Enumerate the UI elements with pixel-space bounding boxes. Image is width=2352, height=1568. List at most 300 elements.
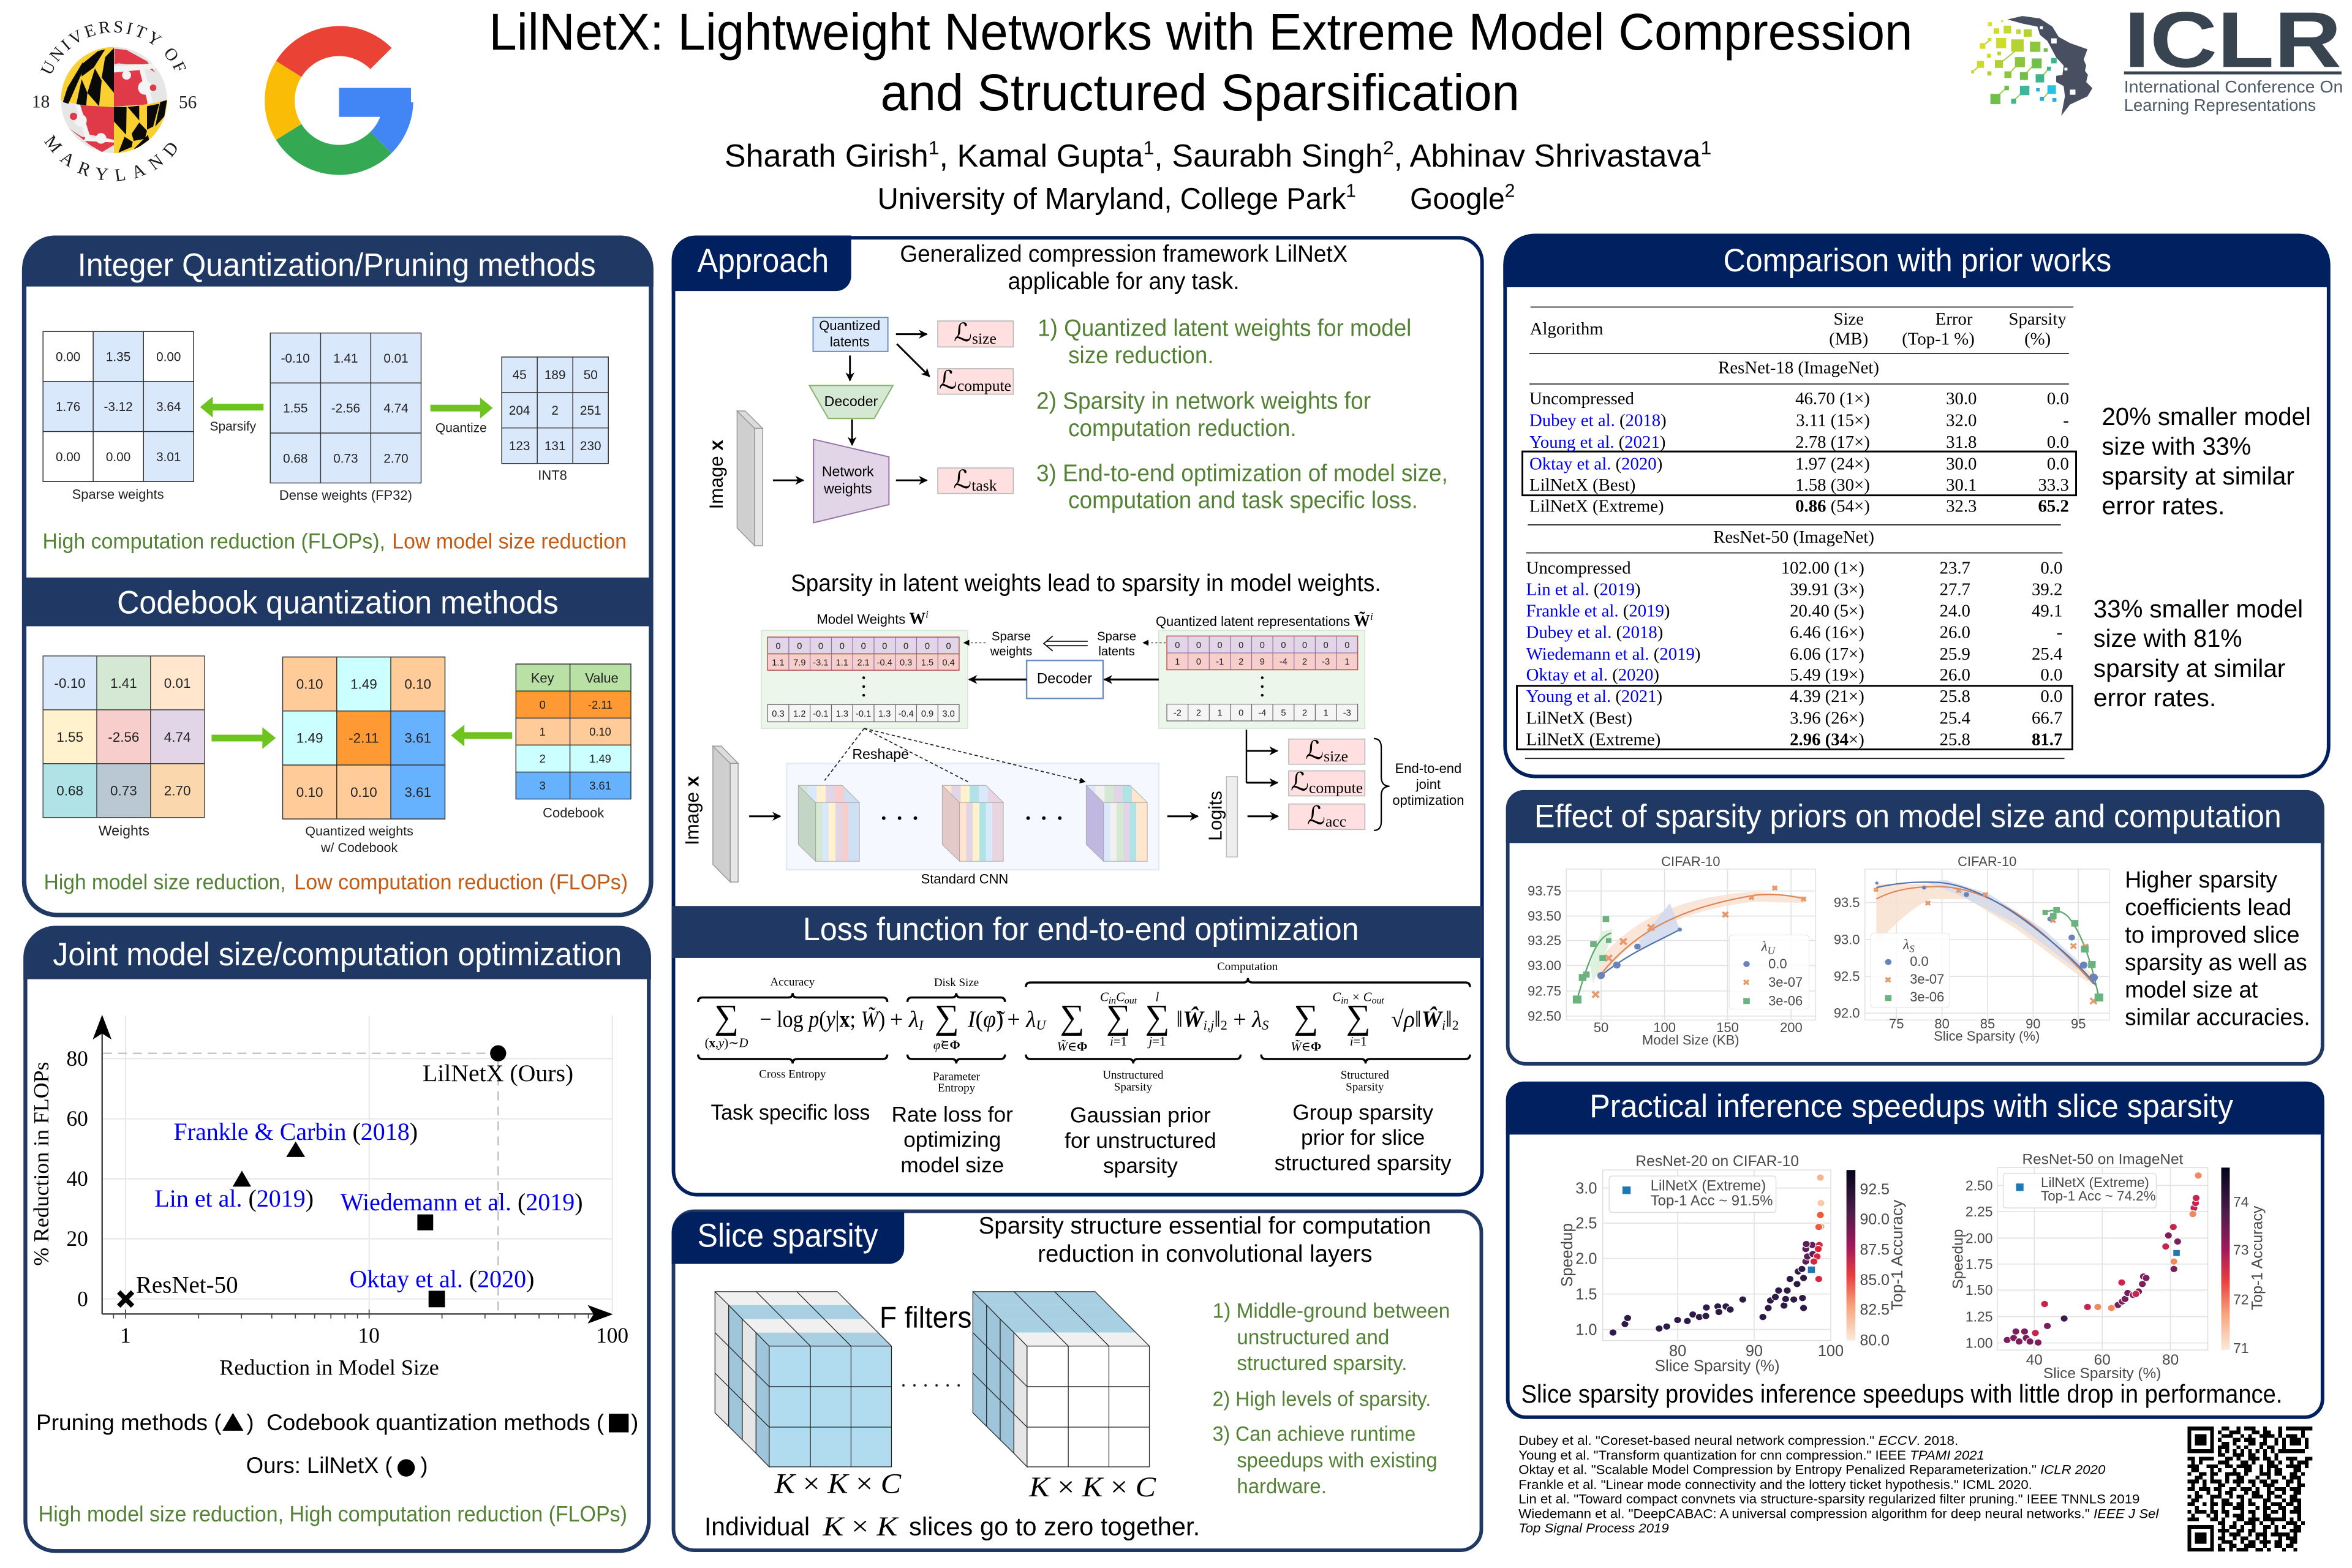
authors: , Abhinav Shrivastava bbox=[1394, 138, 1701, 174]
table: comparison results: 46.70 (1×) bbox=[1795, 389, 1870, 409]
table: codebook: 1 bbox=[540, 725, 546, 738]
box: standard CNN bbox=[786, 764, 1159, 886]
matrix: quantized latents: 1 bbox=[1218, 709, 1223, 718]
table: codebook: 2 bbox=[540, 752, 546, 765]
text: sparsity priors takeaway bbox=[2125, 867, 2310, 1031]
table: sparse weights: Sparse weights bbox=[72, 486, 164, 502]
matrix: model weights: 7.9 bbox=[793, 658, 805, 668]
table: comparison results: 30.1 bbox=[1946, 475, 1977, 495]
text: ResNet-18 takeaway: sparsity at similar bbox=[2101, 462, 2294, 490]
colorbar: ResNet-50 accuracy: 71 bbox=[2233, 1340, 2248, 1356]
arrow: quantize bbox=[431, 398, 493, 435]
table: comparison results: Oktay et al. (2020) bbox=[1526, 665, 1659, 685]
labels: sparse weights and latents: latents bbox=[1098, 645, 1135, 658]
loss boxes: size compute acc: ℒ bbox=[1307, 802, 1325, 830]
matrix: model weights: 1.3 bbox=[836, 709, 848, 719]
equation terms: + bbox=[1227, 1006, 1252, 1032]
matrix: quantized latents: -4 bbox=[1280, 657, 1287, 667]
matrix: model weights: 1.5 bbox=[921, 658, 933, 668]
matrix: quantized latents: 1 bbox=[1344, 657, 1349, 667]
matrix: model weights: 1.3 bbox=[878, 709, 891, 719]
text: ResNet-50 takeaway: 33% smaller model bbox=[2094, 595, 2303, 623]
equation terms: in bbox=[1341, 995, 1349, 1006]
text: slices caption: Individual bbox=[704, 1512, 810, 1540]
text: framework description: Generalized compression framework LilNetX bbox=[900, 241, 1348, 267]
text: speedups takeaway: Slice sparsity provides inference speedups with little drop in performance. bbox=[1521, 1379, 2282, 1408]
chart: model size versus FLOPs: Wiedemann et al. (2019) bbox=[341, 1188, 583, 1216]
arrows: reshape: Reshape bbox=[852, 746, 909, 762]
panel: comparison with prior works bbox=[1503, 234, 2330, 777]
chart: ResNet-50 speedup: ResNet-50 on ImageNet bbox=[2022, 1151, 2184, 1167]
table: quantized weights: 0.10 bbox=[296, 785, 323, 800]
references: Frankle et al. "Linear mode connectivity and the lottery ticket hypothesis." ICML 2020. bbox=[1518, 1477, 2032, 1492]
chart: ResNet-50 speedup: 80 bbox=[2162, 1352, 2179, 1368]
heading: joint optimization bbox=[23, 927, 651, 979]
chart: ResNet-50 speedup: 1.25 bbox=[1966, 1309, 1993, 1325]
table: INT8: 131 bbox=[545, 439, 565, 453]
arrow: weights to quantized bbox=[211, 727, 276, 749]
equation terms: I bbox=[918, 1017, 924, 1033]
matrix: model weights: 0.3 bbox=[900, 658, 912, 668]
matrix: model weights: 0 bbox=[925, 641, 930, 651]
chart: model size versus FLOPs: Lin et al. (2019) bbox=[154, 1185, 314, 1212]
chart: accuracy vs model size: 3e-07 bbox=[1768, 974, 1803, 990]
brace labels: Sparsity bbox=[1346, 1080, 1384, 1093]
chart: accuracy vs slice sparsity: Slice Sparsity (%) bbox=[1934, 1028, 2040, 1044]
table: comparison results: 102.00 (1×) bbox=[1781, 559, 1864, 578]
chart: model size versus FLOPs: 80 bbox=[66, 1046, 88, 1071]
table: sparse weights: 3.01 bbox=[156, 450, 181, 464]
table: dense weights: 0.68 bbox=[283, 451, 307, 466]
text: loss term descriptions: Task specific loss bbox=[710, 1100, 870, 1125]
legend: ResNet-50: LilNetX (Extreme) bbox=[2041, 1175, 2149, 1190]
chart: accuracy vs slice sparsity: 90 bbox=[2026, 1016, 2041, 1031]
table: INT8: 204 bbox=[509, 404, 530, 418]
colorbar: ResNet-20 accuracy: 92.5 bbox=[1860, 1181, 1890, 1198]
table: dense weights: 2.70 bbox=[383, 451, 409, 466]
equation terms: φ̃∈Φ bbox=[933, 1039, 960, 1052]
chart: accuracy vs slice sparsity: 93.0 bbox=[1834, 932, 1860, 947]
table: codebook: Key bbox=[531, 670, 554, 685]
chart: accuracy vs slice sparsity: 75 bbox=[1889, 1016, 1904, 1031]
matrix: model weights: 0 bbox=[861, 641, 866, 651]
chart: accuracy vs slice sparsity: CIFAR-10 bbox=[1958, 854, 2016, 869]
matrix: quantized latents: 0 bbox=[1196, 641, 1201, 650]
chart: ResNet-50 speedup bbox=[1950, 1151, 2266, 1382]
matrix: quantized latents: 2 bbox=[1238, 657, 1243, 667]
table: comparison results: Dubey et al. (2018) bbox=[1529, 410, 1667, 431]
chart: model size versus FLOPs: Frankle & Carbin (2018) bbox=[174, 1118, 418, 1145]
brace labels: Structured bbox=[1341, 1069, 1389, 1082]
references: Oktay et al. "Scalable Model Compression by Entropy Penalized Reparameterization." ICLR 2020 bbox=[1518, 1463, 2105, 1477]
legend: method markers bbox=[36, 1409, 638, 1478]
equation terms: out bbox=[1125, 995, 1137, 1006]
chart: ResNet-50 speedup: 2.00 bbox=[1966, 1230, 1993, 1246]
chart: accuracy vs model size: 93.75 bbox=[1528, 883, 1561, 899]
image slab 2 bbox=[713, 746, 738, 882]
chart: accuracy vs model size bbox=[1528, 854, 1815, 1047]
chart: accuracy vs model size: 200 bbox=[1780, 1020, 1803, 1035]
text: loss term descriptions: Rate loss for bbox=[892, 1102, 1013, 1126]
heading: joint optimization: Joint model size/computation optimization bbox=[53, 937, 622, 973]
chart: accuracy vs model size: 0.0 bbox=[1768, 956, 1787, 971]
brace labels: Computation bbox=[1217, 960, 1278, 973]
box: network weights bbox=[813, 439, 889, 522]
chart: accuracy vs slice sparsity: 95 bbox=[2071, 1016, 2086, 1031]
heading: integer quantization bbox=[22, 235, 654, 287]
text: slices caption: K × K bbox=[822, 1511, 899, 1541]
matrix: quantized latents bbox=[1159, 630, 1365, 728]
heading: inference speedups: Practical inference speedups with slice sparsity bbox=[1589, 1088, 2234, 1125]
labels: sparse weights and latents bbox=[990, 630, 1136, 658]
equation terms: C bbox=[1332, 991, 1341, 1005]
dots between cubes bbox=[902, 1384, 960, 1387]
colorbar: ResNet-20 accuracy bbox=[1847, 1170, 1890, 1349]
table: INT8: 230 bbox=[580, 439, 601, 453]
table: comparison results bbox=[1517, 307, 2076, 758]
table: comparison results: 0.86 (54×) bbox=[1795, 497, 1870, 516]
matrix: quantized latents: 1 bbox=[1175, 657, 1180, 667]
panel: effect of sparsity priors bbox=[1506, 790, 2324, 1064]
chart: accuracy vs slice sparsity: 0.0 bbox=[1910, 954, 1929, 969]
table: comparison results: 66.7 bbox=[2032, 708, 2062, 728]
chart: accuracy vs slice sparsity: 3e-07 bbox=[1910, 971, 1944, 987]
label: image x: Image x bbox=[682, 775, 703, 845]
table: dense weights: -2.56 bbox=[331, 401, 360, 415]
table: comparison results: 0.0 bbox=[2047, 432, 2069, 452]
legend: method markers: Ours: LilNetX ( bbox=[246, 1452, 393, 1478]
panel: practical inference speedups bbox=[1506, 1082, 2324, 1417]
equation terms: ∑ bbox=[1346, 998, 1371, 1036]
chart: ResNet-50 speedup: Slice Sparsity (%) bbox=[2043, 1365, 2161, 1382]
text: codebook tradeoff: High model size reduction, bbox=[44, 870, 286, 894]
heading: codebook quantization bbox=[25, 578, 650, 626]
table: weights: -0.10 bbox=[55, 676, 86, 691]
matrix: model weights: 1.1 bbox=[772, 658, 785, 668]
table: quantized weights: -2.11 bbox=[349, 731, 379, 746]
chart: ResNet-50 speedup: 1.00 bbox=[1966, 1335, 1993, 1351]
text: framework description: applicable for any task. bbox=[1008, 268, 1240, 295]
chart: accuracy vs model size: 150 bbox=[1716, 1020, 1739, 1035]
matrix: model weights: 0 bbox=[946, 641, 951, 651]
table: comparison results: LilNetX (Best) bbox=[1526, 708, 1632, 728]
equation terms: ‖ bbox=[1214, 1006, 1221, 1032]
panel: integer quantization and codebook methods bbox=[22, 235, 654, 915]
text: loss term descriptions: for unstructured bbox=[1065, 1128, 1216, 1153]
table: comparison results: Uncompressed bbox=[1529, 389, 1635, 409]
chart: model size versus FLOPs: Oktay et al. (2020) bbox=[349, 1265, 534, 1293]
loss boxes: size compute acc: size bbox=[1324, 747, 1348, 765]
chart: accuracy vs slice sparsity: S bbox=[1909, 943, 1915, 954]
table: comparison results: 30.0 bbox=[1946, 389, 1977, 409]
chart: ResNet-20 speedup: 80 bbox=[1669, 1343, 1686, 1360]
table: comparison results: 25.4 bbox=[2032, 644, 2062, 664]
box: network weights: weights bbox=[823, 481, 872, 497]
brace labels: Sparsity bbox=[1114, 1080, 1153, 1093]
heading: codebook quantization: Codebook quantization methods bbox=[117, 585, 559, 621]
logo: Google G bbox=[280, 41, 411, 160]
chart: model size versus FLOPs: 100 bbox=[596, 1323, 628, 1348]
heading: loss function bbox=[672, 906, 1482, 958]
matrix: model weights: 0 bbox=[775, 641, 781, 651]
authors: 1 bbox=[1144, 137, 1154, 159]
chart: model size versus FLOPs: 1 bbox=[120, 1323, 131, 1348]
equation terms: 2 bbox=[1452, 1017, 1459, 1033]
table: INT8: 189 bbox=[545, 368, 565, 382]
box: standard CNN: Standard CNN bbox=[921, 871, 1008, 886]
colorbar: ResNet-50 accuracy bbox=[2222, 1167, 2249, 1356]
brace labels bbox=[759, 960, 1389, 1095]
text: slice sparsity points: 3) Can achieve runtime bbox=[1213, 1423, 1415, 1446]
table: comparison results: 26.0 bbox=[1940, 622, 1970, 643]
loss boxes: size compute acc: acc bbox=[1325, 812, 1346, 830]
table: comparison results: Size bbox=[1833, 309, 1864, 329]
table: quantized weights: Quantized weights bbox=[305, 824, 413, 839]
matrix: model weights: -0.4 bbox=[899, 709, 914, 719]
logo: University of Maryland seal: 18 bbox=[32, 92, 50, 112]
equation terms: U bbox=[1036, 1017, 1047, 1033]
logo: University of Maryland seal: MARYLAND bbox=[44, 135, 176, 181]
matrix: model weights bbox=[761, 630, 968, 728]
labels: sparse weights and latents: Sparse bbox=[1097, 630, 1136, 644]
matrix: quantized latents: 0 bbox=[1344, 641, 1349, 650]
chart: accuracy vs model size: 3e-06 bbox=[1768, 993, 1803, 1009]
equation terms: ∑ bbox=[1060, 998, 1084, 1036]
labels: sparse weights and latents: weights bbox=[990, 645, 1032, 658]
text: integer quantization tradeoff bbox=[42, 530, 627, 554]
table: codebook: -2.11 bbox=[588, 698, 612, 711]
matrix: model weights: -0.4 bbox=[877, 658, 892, 668]
colorbar: ResNet-50 accuracy: 74 bbox=[2233, 1194, 2249, 1210]
text: numbered approach points: 3) End-to-end optimization of model size, bbox=[1036, 461, 1448, 487]
table: comparison results: (%) bbox=[2024, 329, 2051, 349]
table: comparison results: 6.46 (16×) bbox=[1790, 622, 1864, 643]
matrix: model weights: 3.0 bbox=[942, 709, 955, 719]
chart: accuracy vs model size: 50 bbox=[1594, 1020, 1608, 1035]
box: decoder bbox=[1027, 660, 1103, 698]
table: dense weights: 0.01 bbox=[383, 352, 409, 366]
box: network weights: Network bbox=[822, 464, 874, 480]
text: slice sparsity points bbox=[1213, 1300, 1450, 1498]
equation terms: 2 bbox=[1221, 1017, 1227, 1033]
table: quantized weights: 1.49 bbox=[350, 677, 377, 692]
text: loss term descriptions: Gaussian prior bbox=[1070, 1103, 1211, 1128]
chart: accuracy vs slice sparsity bbox=[1834, 854, 2109, 1044]
image slab bbox=[737, 411, 763, 546]
title bbox=[489, 3, 1912, 121]
matrix: model weights: -0.1 bbox=[856, 709, 871, 719]
table: comparison results: Wiedemann et al. (2019) bbox=[1526, 644, 1700, 664]
chart: accuracy vs model size: CIFAR-10 bbox=[1661, 854, 1720, 869]
table: comparison results: LilNetX (Best) bbox=[1529, 475, 1635, 495]
table: comparison results: 0.0 bbox=[2040, 559, 2062, 578]
chart: ResNet-20 speedup: Speedup bbox=[1559, 1223, 1576, 1287]
matrix: model weights: 0.4 bbox=[942, 658, 955, 668]
references: Dubey et al. "Coreset-based neural network compression." ECCV . 2018. bbox=[1518, 1433, 1958, 1448]
label: model weights: Model Weights W bbox=[817, 609, 925, 628]
table: comparison results: 30.0 bbox=[1946, 454, 1977, 474]
text: slice description: reduction in convolutional layers bbox=[1038, 1241, 1373, 1267]
table: sparse weights: 0.00 bbox=[156, 350, 181, 364]
table: weights bbox=[43, 656, 205, 839]
table: weights: Weights bbox=[99, 823, 149, 839]
diagram: LilNetX pipeline bbox=[706, 317, 1013, 546]
text: ResNet-18 takeaway: error rates. bbox=[2101, 492, 2225, 519]
title: LilNetX: Lightweight Networks with Extreme Model Compression bbox=[489, 3, 1912, 61]
table: weights: 0.01 bbox=[164, 676, 190, 691]
text: numbered approach points: 2) Sparsity in network weights for bbox=[1036, 388, 1371, 414]
heading: comparison bbox=[1503, 234, 2330, 287]
legend: method markers: Codebook quantization methods ( bbox=[266, 1409, 605, 1435]
legend: ResNet-20: LilNetX (Extreme) bbox=[1651, 1178, 1766, 1194]
chart: accuracy vs slice sparsity: 85 bbox=[1980, 1016, 1995, 1031]
legend: method markers: Pruning methods ( bbox=[36, 1409, 222, 1435]
matrix: quantized latents: -3 bbox=[1322, 657, 1330, 667]
table: INT8: INT8 bbox=[538, 468, 567, 483]
box: quantized latents: Quantized bbox=[819, 318, 880, 333]
text: ResNet-18 takeaway: 20% smaller model bbox=[2101, 403, 2311, 431]
table: comparison results: 26.0 bbox=[1940, 665, 1970, 685]
equation terms: i=1 bbox=[1350, 1035, 1366, 1049]
legend: method markers: ) bbox=[246, 1409, 254, 1435]
table: comparison results: 25.8 bbox=[1940, 729, 1970, 749]
references bbox=[1518, 1433, 2160, 1536]
chart: accuracy vs model size: 92.50 bbox=[1528, 1008, 1561, 1023]
table: comparison results: 5.49 (19×) bbox=[1790, 665, 1864, 685]
chart: model size versus FLOPs: LilNetX (Ours) bbox=[423, 1060, 573, 1087]
table: comparison results: Young et al. (2021) bbox=[1526, 687, 1662, 706]
table: comparison results: (MB) bbox=[1829, 329, 1868, 349]
heading: comparison: Comparison with prior works bbox=[1723, 243, 2111, 279]
table: quantized weights: 0.10 bbox=[296, 677, 323, 692]
table: comparison results: 32.3 bbox=[1946, 497, 1977, 516]
chart: accuracy vs slice sparsity: λ bbox=[1903, 937, 1909, 952]
matrix: model weights: 2.1 bbox=[857, 658, 870, 668]
matrix: quantized latents: -2 bbox=[1174, 709, 1182, 718]
chart: accuracy vs model size: 93.25 bbox=[1528, 933, 1561, 948]
table: weights: 4.74 bbox=[164, 729, 190, 745]
table: sparse weights: 1.76 bbox=[56, 400, 80, 414]
chart: accuracy vs model size: λ bbox=[1762, 939, 1768, 955]
text: loss term descriptions: structured sparsity bbox=[1275, 1150, 1452, 1175]
table: comparison results: Sparsity bbox=[2009, 309, 2067, 329]
heading: approach tab: Approach bbox=[698, 241, 829, 279]
equation terms: ∑ bbox=[1294, 998, 1318, 1036]
authors: 1 bbox=[929, 137, 940, 159]
formula braces bbox=[698, 978, 1470, 1063]
QR code bbox=[2188, 1427, 2313, 1551]
equation terms: + λ bbox=[890, 1006, 919, 1032]
table: quantized weights: 3.61 bbox=[404, 785, 431, 800]
matrix: model weights: -3.1 bbox=[813, 658, 829, 668]
arrows: reshape bbox=[824, 728, 1085, 782]
loss boxes: task bbox=[971, 477, 997, 494]
table: codebook: Codebook bbox=[543, 805, 605, 821]
table: codebook: 0.10 bbox=[589, 725, 611, 738]
bar: logits bbox=[1205, 777, 1237, 857]
text: loss term descriptions: Group sparsity bbox=[1292, 1100, 1433, 1125]
table: comparison results: 3.96 (26×) bbox=[1790, 708, 1864, 728]
table: comparison results: Oktay et al. (2020) bbox=[1529, 454, 1662, 474]
matrix: quantized latents: -4 bbox=[1258, 709, 1266, 718]
text: slice sparsity points: 1) Middle-ground between bbox=[1213, 1300, 1450, 1323]
table: comparison results: 65.2 bbox=[2038, 497, 2069, 516]
matrix: quantized latents: 1 bbox=[1324, 709, 1329, 718]
chart: accuracy vs model size: Model Size (KB) bbox=[1642, 1032, 1740, 1047]
equation terms: W̃∈Φ bbox=[1057, 1039, 1087, 1054]
matrix: quantized latents: 0 bbox=[1175, 641, 1180, 650]
table: dense weights bbox=[270, 333, 421, 503]
text: framework description bbox=[900, 241, 1348, 295]
matrix: quantized latents: 5 bbox=[1281, 709, 1286, 718]
table: INT8: 2 bbox=[551, 404, 559, 418]
equation terms: out bbox=[1372, 995, 1384, 1006]
text: slice sparsity points: structured sparsity. bbox=[1237, 1352, 1408, 1375]
matrix: quantized latents: 0 bbox=[1260, 641, 1265, 650]
loss boxes bbox=[938, 318, 1013, 494]
chart: ResNet-20 speedup: Slice Sparsity (%) bbox=[1655, 1357, 1780, 1374]
table: codebook bbox=[516, 664, 631, 821]
bar: logits: Logits bbox=[1205, 791, 1226, 841]
chart: model size versus FLOPs: 40 bbox=[66, 1166, 88, 1191]
diagram: model weights and latents bbox=[682, 609, 1464, 886]
equation terms: S bbox=[1262, 1017, 1268, 1033]
equation terms: ∑ bbox=[1145, 998, 1169, 1036]
authors: 2 bbox=[1383, 137, 1394, 159]
heading: inference speedups bbox=[1506, 1082, 2324, 1134]
matrix: quantized latents: -1 bbox=[1216, 657, 1224, 667]
heading: slice sparsity tab: Slice sparsity bbox=[698, 1217, 878, 1254]
chart: ResNet-50 speedup: 60 bbox=[2094, 1352, 2111, 1368]
text: numbered approach points: computation reduction. bbox=[1068, 415, 1297, 442]
arrows bbox=[773, 334, 930, 480]
table: comparison results: - bbox=[2057, 622, 2062, 643]
table: comparison results: 0.0 bbox=[2047, 389, 2069, 409]
authors: , Saurabh Singh bbox=[1154, 138, 1383, 174]
label: F filters: F filters bbox=[880, 1301, 971, 1334]
brace labels: Cross Entropy bbox=[759, 1068, 826, 1081]
chart: ResNet-20 speedup: ResNet-20 on CIFAR-10 bbox=[1635, 1153, 1799, 1170]
table: sparse weights: 0.00 bbox=[106, 450, 130, 464]
table: INT8: 45 bbox=[513, 368, 527, 382]
brace: end to end joint optimization: optimization bbox=[1392, 793, 1464, 808]
chart: ResNet-20 speedup: 3.0 bbox=[1575, 1180, 1597, 1197]
title: and Structured Sparsification bbox=[881, 64, 1520, 121]
heading: effect of sparsity: Effect of sparsity priors on model size and computation bbox=[1534, 799, 2282, 835]
matrix: model weights: 0.3 bbox=[772, 709, 785, 719]
heading: integer quantization: Integer Quantization/Pruning methods bbox=[78, 247, 596, 284]
table: comparison results: 27.7 bbox=[1940, 579, 1970, 599]
table: dense weights: 0.73 bbox=[333, 451, 358, 466]
equation terms: ‖ bbox=[1446, 1006, 1452, 1032]
table: INT8: 50 bbox=[584, 368, 598, 382]
equation terms: W̃∈Φ bbox=[1291, 1039, 1321, 1054]
text: sparsity priors takeaway: to improved slice bbox=[2125, 922, 2300, 948]
matrix: quantized latents: 0 bbox=[1302, 641, 1307, 650]
text: sparsity priors takeaway: coefficients lead bbox=[2125, 895, 2291, 921]
brace: end to end joint optimization: joint bbox=[1415, 777, 1441, 792]
chart: model size versus FLOPs: Reduction in Model Size bbox=[219, 1355, 439, 1380]
table: codebook: 3 bbox=[540, 779, 546, 792]
text: ResNet-50 takeaway: error rates. bbox=[2094, 684, 2216, 712]
text: ResNet-18 takeaway: size with 33% bbox=[2101, 432, 2251, 460]
text: loss term descriptions: model size bbox=[900, 1153, 1004, 1177]
table: comparison results: 24.0 bbox=[1940, 601, 1970, 621]
arrow: sparsify bbox=[200, 397, 263, 434]
brace labels: Entropy bbox=[938, 1082, 976, 1095]
text: sparsity priors takeaway: sparsity as well as bbox=[2125, 950, 2307, 976]
text: numbered approach points: computation and task specific loss. bbox=[1068, 488, 1418, 514]
